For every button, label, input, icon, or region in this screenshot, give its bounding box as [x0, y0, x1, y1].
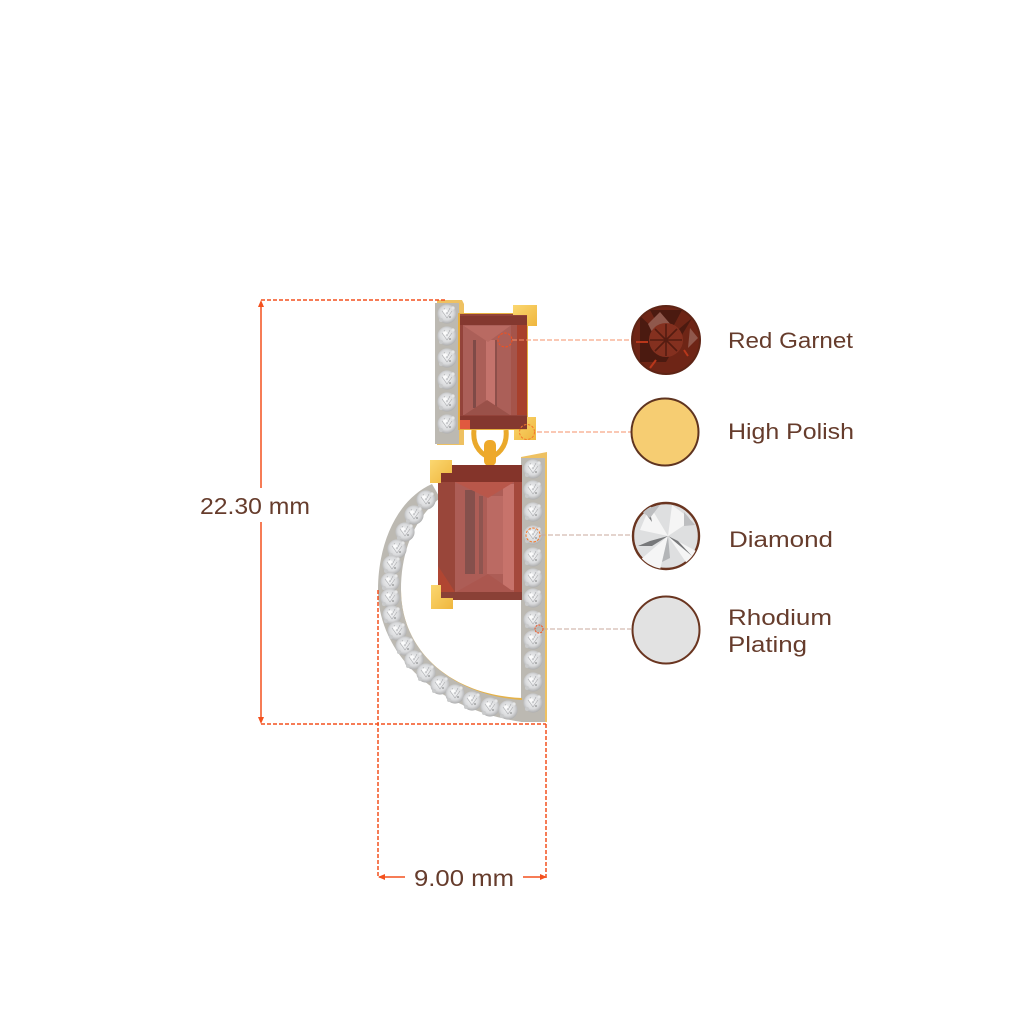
icon: diamond — [633, 503, 699, 570]
gold loop connector — [474, 430, 506, 466]
label: rhodium plating: Rhodium — [728, 605, 832, 630]
width dimension — [378, 590, 547, 891]
leader lines — [498, 333, 631, 633]
upper prongs — [513, 305, 537, 440]
icon: red garnet — [631, 305, 701, 375]
legend: diamond — [633, 503, 833, 570]
legend: high polish — [632, 398, 854, 466]
icon: rhodium swatch — [632, 596, 700, 664]
legend: red garnet — [631, 305, 854, 375]
height label: 22.30 mm — [200, 493, 310, 519]
lower frame arc with diamonds — [378, 484, 522, 722]
lower prongs — [430, 460, 453, 609]
label: high polish: High Polish — [728, 419, 854, 444]
label: rhodium plating: Plating — [728, 632, 807, 657]
width label: 9.00 mm — [414, 865, 514, 891]
upper garnet — [458, 313, 528, 430]
label: diamond: Diamond — [729, 527, 833, 552]
legend: rhodium plating — [632, 596, 832, 664]
lower garnet — [438, 465, 522, 600]
icon: gold swatch — [632, 398, 698, 466]
height dimension — [200, 300, 546, 724]
top bar with diamonds — [435, 300, 464, 445]
earring — [378, 300, 547, 722]
lower frame right bar with diamonds — [521, 452, 547, 722]
label: red garnet: Red Garnet — [728, 328, 854, 353]
